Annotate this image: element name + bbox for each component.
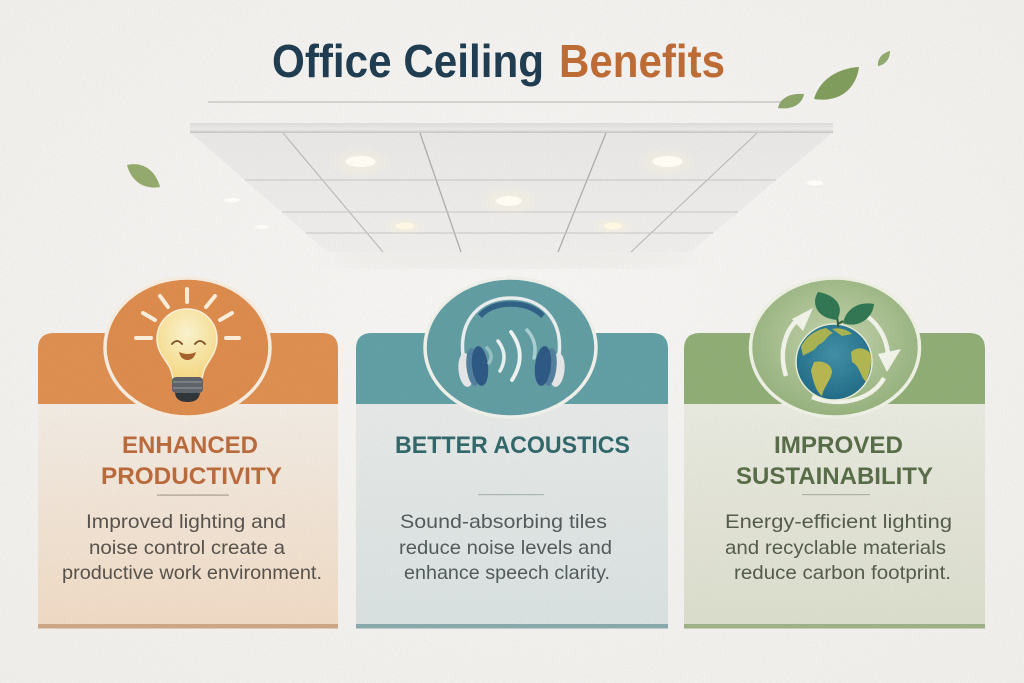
icon: sprout leaves (815, 292, 874, 327)
card header (356, 333, 668, 404)
heading (736, 432, 933, 490)
heading: IMPROVED (774, 432, 903, 459)
card body (38, 404, 338, 628)
icon circle (105, 278, 270, 417)
description (62, 511, 322, 584)
card body (684, 404, 985, 628)
card header (38, 333, 338, 404)
icon: headphones (457, 298, 566, 388)
icon: globe (796, 324, 872, 400)
ceiling shadow (325, 249, 695, 267)
divider (157, 494, 229, 496)
ceiling edge bar (190, 123, 833, 133)
title: Benefits (559, 35, 725, 87)
card footer strip (38, 624, 338, 628)
title (272, 35, 725, 87)
ceiling tiles (191, 133, 832, 252)
icon: recycling arrows (783, 308, 901, 402)
description (725, 511, 952, 584)
divider (802, 494, 870, 495)
card header (684, 333, 985, 404)
title underline (208, 101, 786, 103)
description: Sound-absorbing tiles (400, 511, 607, 533)
icon: leaf left (127, 164, 160, 188)
card body (356, 404, 668, 628)
card footer strip (356, 624, 668, 628)
panel: enhanced productivity (38, 278, 338, 628)
description: Improved lighting and (86, 511, 286, 533)
description: reduce noise levels and (399, 537, 612, 559)
description: reduce carbon footprint. (734, 562, 951, 584)
description: Energy-efficient lighting (725, 511, 952, 533)
title: Office Ceiling (272, 35, 544, 87)
heading: PRODUCTIVITY (101, 463, 282, 490)
panel: better acoustics (356, 278, 668, 628)
heading: BETTER ACOUSTICS (395, 432, 630, 459)
divider (478, 494, 544, 495)
card footer strip (684, 624, 985, 628)
heading: ENHANCED (122, 432, 258, 459)
ceiling illustration (190, 123, 833, 267)
icon: falling leaves top right (778, 51, 890, 108)
icon circle (750, 278, 920, 417)
icon: light bulb (136, 289, 239, 402)
description: productive work environment. (62, 562, 322, 584)
ceiling grid (245, 133, 776, 252)
description: enhance speech clarity. (404, 562, 610, 584)
description: and recyclable materials (725, 537, 946, 559)
description: noise control create a (89, 537, 285, 559)
ceiling lights (224, 146, 823, 236)
description (399, 511, 612, 584)
icon circle (425, 278, 596, 417)
panel: improved sustainability (684, 278, 985, 628)
heading (101, 432, 282, 490)
heading: SUSTAINABILITY (736, 463, 933, 490)
